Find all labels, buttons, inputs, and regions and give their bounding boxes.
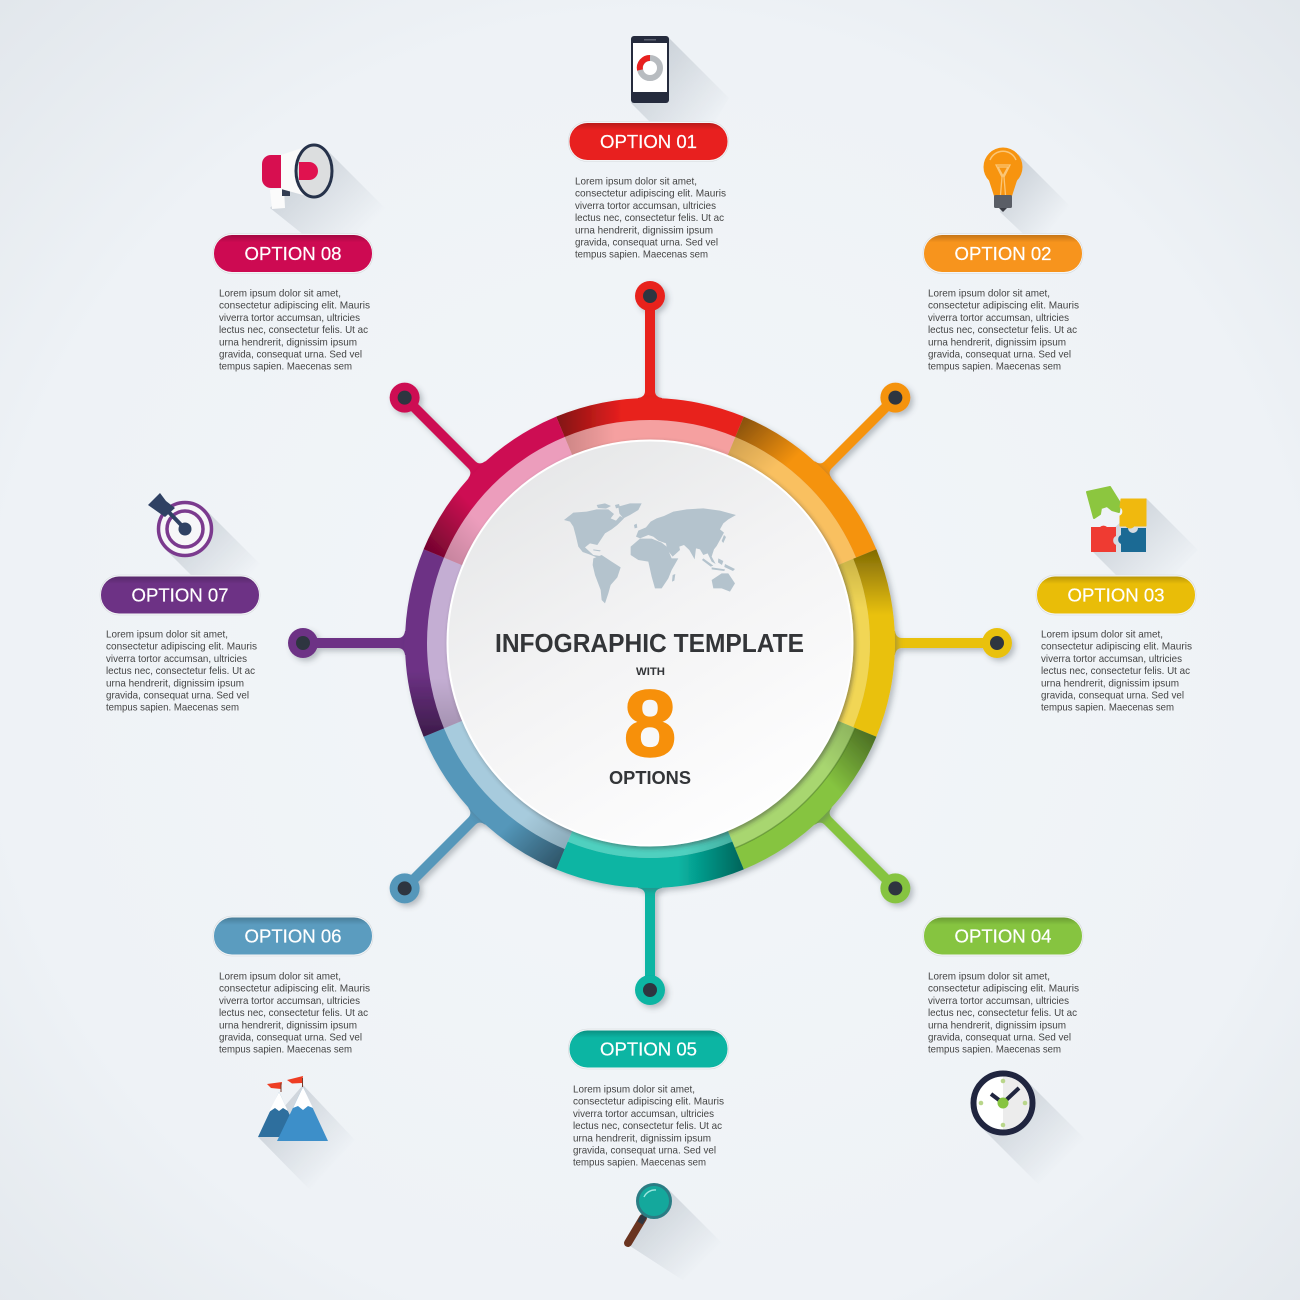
label pill (213, 234, 373, 274)
segmented ring (405, 398, 895, 888)
panel: option 02 (923, 148, 1083, 373)
body text: Lorem ipsum dolor sit amet, (573, 1084, 695, 1096)
body text: gravida, consequat urna. Sed vel (106, 690, 249, 702)
label pill: OPTION 07 (132, 584, 228, 606)
body text: urna hendrerit, dignissim ipsum (219, 1020, 357, 1031)
label pill: OPTION 05 (600, 1038, 697, 1060)
body text: urna hendrerit, dignissim ipsum (573, 1133, 711, 1144)
body text: lectus nec, consectetur felis. Ut ac (219, 325, 368, 336)
label pill: OPTION 02 (954, 243, 1052, 264)
panel: option 04 (923, 916, 1086, 1186)
panel: option 07 (100, 493, 262, 714)
body text (575, 176, 726, 261)
body text: lectus nec, consectetur felis. Ut ac (928, 1008, 1077, 1019)
body text: consectetur adipiscing elit. Mauris (1041, 642, 1192, 653)
body text: Lorem ipsum dolor sit amet, (219, 972, 341, 982)
body text: gravida, consequat urna. Sed vel (575, 238, 718, 248)
body text: Lorem ipsum dolor sit amet, (928, 972, 1050, 982)
body text: viverra tortor accumsan, ultricies (575, 201, 716, 212)
label pill: OPTION 06 (244, 926, 342, 946)
body text: urna hendrerit, dignissim ipsum (219, 337, 357, 348)
with label: WITH (636, 666, 665, 678)
body text: urna hendrerit, dignissim ipsum (106, 678, 244, 689)
body text: consectetur adipiscing elit. Mauris (928, 984, 1079, 995)
body text: lectus nec, consectetur felis. Ut ac (573, 1121, 722, 1132)
body text: lectus nec, consectetur felis. Ut ac (928, 325, 1077, 336)
body text: viverra tortor accumsan, ultricies (573, 1109, 714, 1120)
spokes with end dots (288, 281, 1012, 1005)
body text: lectus nec, consectetur felis. Ut ac (106, 666, 255, 677)
body text: Lorem ipsum dolor sit amet, (928, 288, 1050, 300)
icon: megaphone (262, 144, 385, 260)
body text: urna hendrerit, dignissim ipsum (1041, 678, 1179, 689)
body text: urna hendrerit, dignissim ipsum (928, 337, 1066, 348)
icon: clock (974, 1074, 1086, 1186)
label pill (100, 575, 260, 615)
panel: option 01 (568, 36, 729, 261)
body text: viverra tortor accumsan, ultricies (219, 996, 360, 1007)
body text: tempus sapien. Maecenas sem (928, 362, 1061, 373)
label pill (923, 916, 1083, 956)
options label: OPTIONS (609, 768, 691, 788)
label pill (1036, 575, 1196, 615)
label pill (568, 122, 728, 162)
body text (219, 972, 370, 1056)
panel: option 03 (1036, 487, 1198, 714)
body text: tempus sapien. Maecenas sem (1041, 703, 1174, 714)
body text: consectetur adipiscing elit. Mauris (219, 301, 370, 312)
body text: consectetur adipiscing elit. Mauris (106, 642, 257, 653)
body text: urna hendrerit, dignissim ipsum (928, 1020, 1066, 1031)
body text: consectetur adipiscing elit. Mauris (928, 301, 1079, 312)
panel: option 06 (213, 916, 373, 1190)
icon: smartphone (631, 36, 729, 163)
body text: viverra tortor accumsan, ultricies (106, 654, 247, 665)
body text: viverra tortor accumsan, ultricies (1041, 654, 1182, 665)
body text: gravida, consequat urna. Sed vel (928, 1032, 1071, 1044)
icon: mountains with flags (258, 1076, 355, 1190)
panel: option 05 (568, 1029, 728, 1285)
body text: consectetur adipiscing elit. Mauris (573, 1097, 724, 1108)
label pill: OPTION 01 (600, 131, 697, 152)
body text: tempus sapien. Maecenas sem (219, 362, 352, 373)
body text: lectus nec, consectetur felis. Ut ac (575, 213, 724, 224)
body text: consectetur adipiscing elit. Mauris (219, 984, 370, 995)
number 8: 8 (624, 671, 676, 777)
body text: tempus sapien. Maecenas sem (928, 1045, 1061, 1056)
icon: light bulb (984, 148, 1072, 245)
body text: gravida, consequat urna. Sed vel (573, 1146, 716, 1156)
body text (928, 288, 1079, 373)
body text: tempus sapien. Maecenas sem (573, 1158, 706, 1169)
title: INFOGRAPHIC TEMPLATE (495, 630, 804, 658)
body text: tempus sapien. Maecenas sem (575, 250, 708, 261)
body text: viverra tortor accumsan, ultricies (219, 313, 360, 324)
body text: Lorem ipsum dolor sit amet, (575, 176, 697, 188)
body text: Lorem ipsum dolor sit amet, (219, 288, 341, 300)
body text: lectus nec, consectetur felis. Ut ac (219, 1008, 368, 1019)
body text (219, 288, 370, 373)
body text: lectus nec, consectetur felis. Ut ac (1041, 666, 1190, 677)
body text: gravida, consequat urna. Sed vel (928, 350, 1071, 360)
icon: magnifying glass (627, 1184, 725, 1285)
body text: tempus sapien. Maecenas sem (219, 1045, 352, 1056)
label pill: OPTION 08 (244, 243, 342, 264)
label pill (213, 916, 373, 956)
label pill (923, 234, 1083, 274)
body text: consectetur adipiscing elit. Mauris (575, 189, 726, 200)
label pill: OPTION 04 (954, 926, 1052, 946)
world map (564, 503, 736, 603)
body text (106, 630, 257, 714)
icon: puzzle (1087, 487, 1198, 604)
body text: tempus sapien. Maecenas sem (106, 703, 239, 714)
body text: viverra tortor accumsan, ultricies (928, 996, 1069, 1007)
body text (1041, 630, 1192, 714)
body text: gravida, consequat urna. Sed vel (1041, 690, 1184, 702)
body text (928, 972, 1079, 1056)
body text: viverra tortor accumsan, ultricies (928, 313, 1069, 324)
body text: Lorem ipsum dolor sit amet, (1041, 630, 1163, 640)
label pill (568, 1029, 728, 1069)
body text: gravida, consequat urna. Sed vel (219, 1032, 362, 1044)
label pill: OPTION 03 (1068, 584, 1164, 606)
center white disc (448, 440, 852, 846)
panel: option 08 (213, 144, 385, 373)
body text: Lorem ipsum dolor sit amet, (106, 630, 228, 640)
body text (573, 1084, 724, 1169)
icon: target with dart (148, 493, 262, 606)
body text: gravida, consequat urna. Sed vel (219, 350, 362, 360)
body text: urna hendrerit, dignissim ipsum (575, 225, 713, 236)
central diagram (288, 281, 1012, 1005)
